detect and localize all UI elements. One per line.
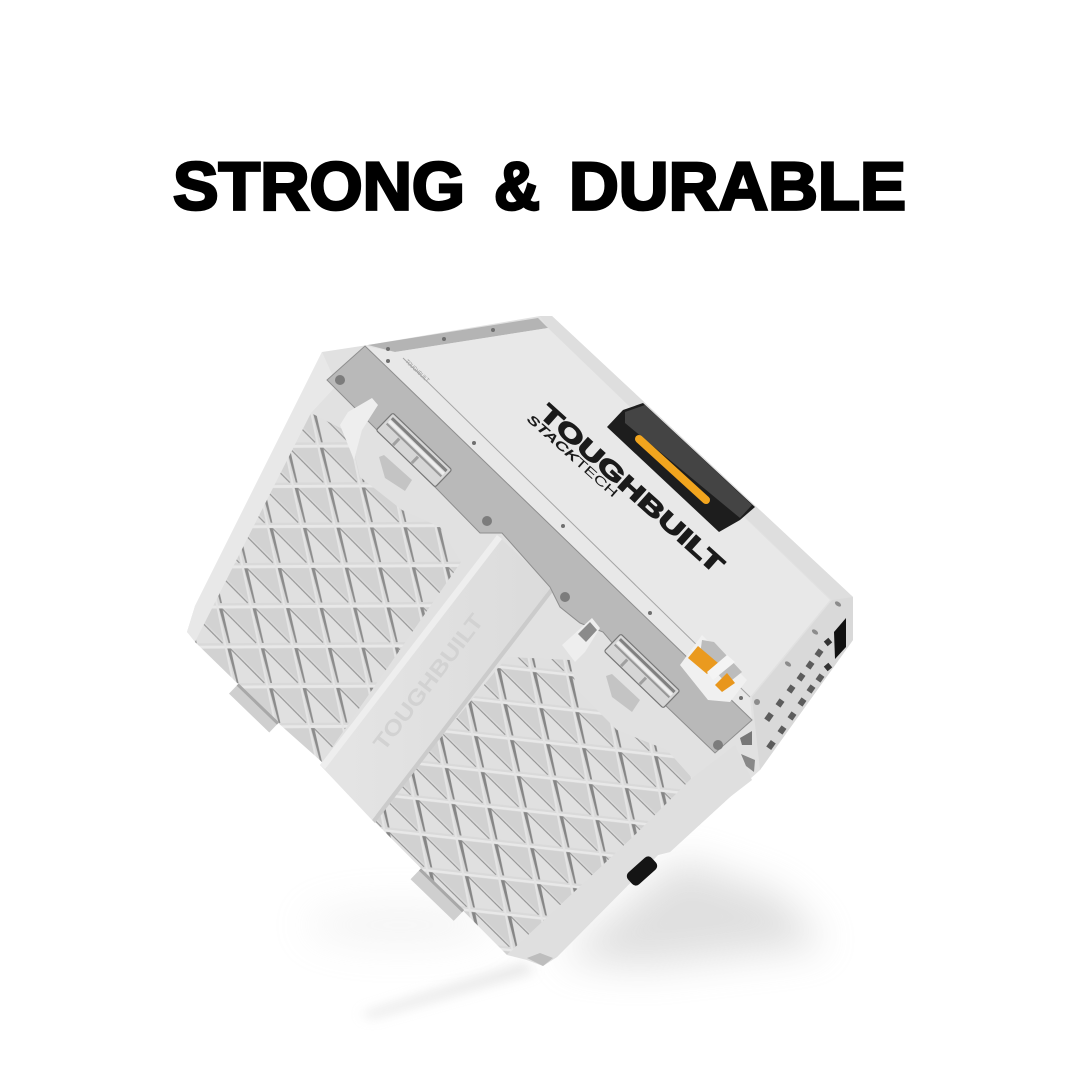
side screws	[754, 600, 842, 705]
product: tool box	[187, 316, 853, 966]
orange latch	[680, 635, 747, 702]
foot pad	[527, 953, 553, 966]
side vent holes	[764, 638, 832, 750]
top frame	[540, 316, 853, 600]
central ridge	[320, 535, 555, 823]
lid seam line	[403, 358, 750, 697]
handle latch upper	[376, 413, 452, 487]
title	[173, 148, 906, 224]
panel: top lid	[365, 328, 830, 720]
strip mounting holes	[335, 375, 723, 750]
recess lower	[606, 674, 640, 712]
logo wordmark: TOUGHBUILT	[534, 399, 729, 579]
title: DURABLE	[569, 148, 906, 224]
small lid label: TOUGHBUILT	[404, 359, 430, 384]
lid screws	[386, 328, 743, 700]
panel: lower lattice	[373, 657, 692, 955]
bottom clip	[411, 868, 464, 921]
embossed ridge logo: TOUGHBUILT	[368, 608, 489, 755]
bottom edge band	[507, 745, 752, 966]
recess upper	[379, 455, 412, 491]
grey side strip	[327, 346, 752, 753]
left frame band	[187, 352, 337, 642]
storage handle	[607, 403, 755, 532]
black knob	[625, 854, 659, 888]
panel: left lattice	[195, 413, 461, 762]
brand logo	[524, 399, 729, 579]
title: &	[494, 148, 540, 224]
lower left clip	[229, 684, 279, 732]
clip middle	[562, 618, 600, 662]
logo sub brand: STACK TECH	[524, 412, 621, 500]
box silhouette	[187, 316, 853, 966]
handle latch lower	[604, 634, 680, 708]
title: STRONG	[173, 148, 465, 224]
top grey strip	[368, 318, 548, 352]
corner bracket vents	[740, 731, 755, 772]
ground shadow	[305, 860, 825, 1018]
side panel	[752, 597, 853, 770]
clip upper	[340, 398, 378, 460]
side power socket	[834, 618, 846, 659]
